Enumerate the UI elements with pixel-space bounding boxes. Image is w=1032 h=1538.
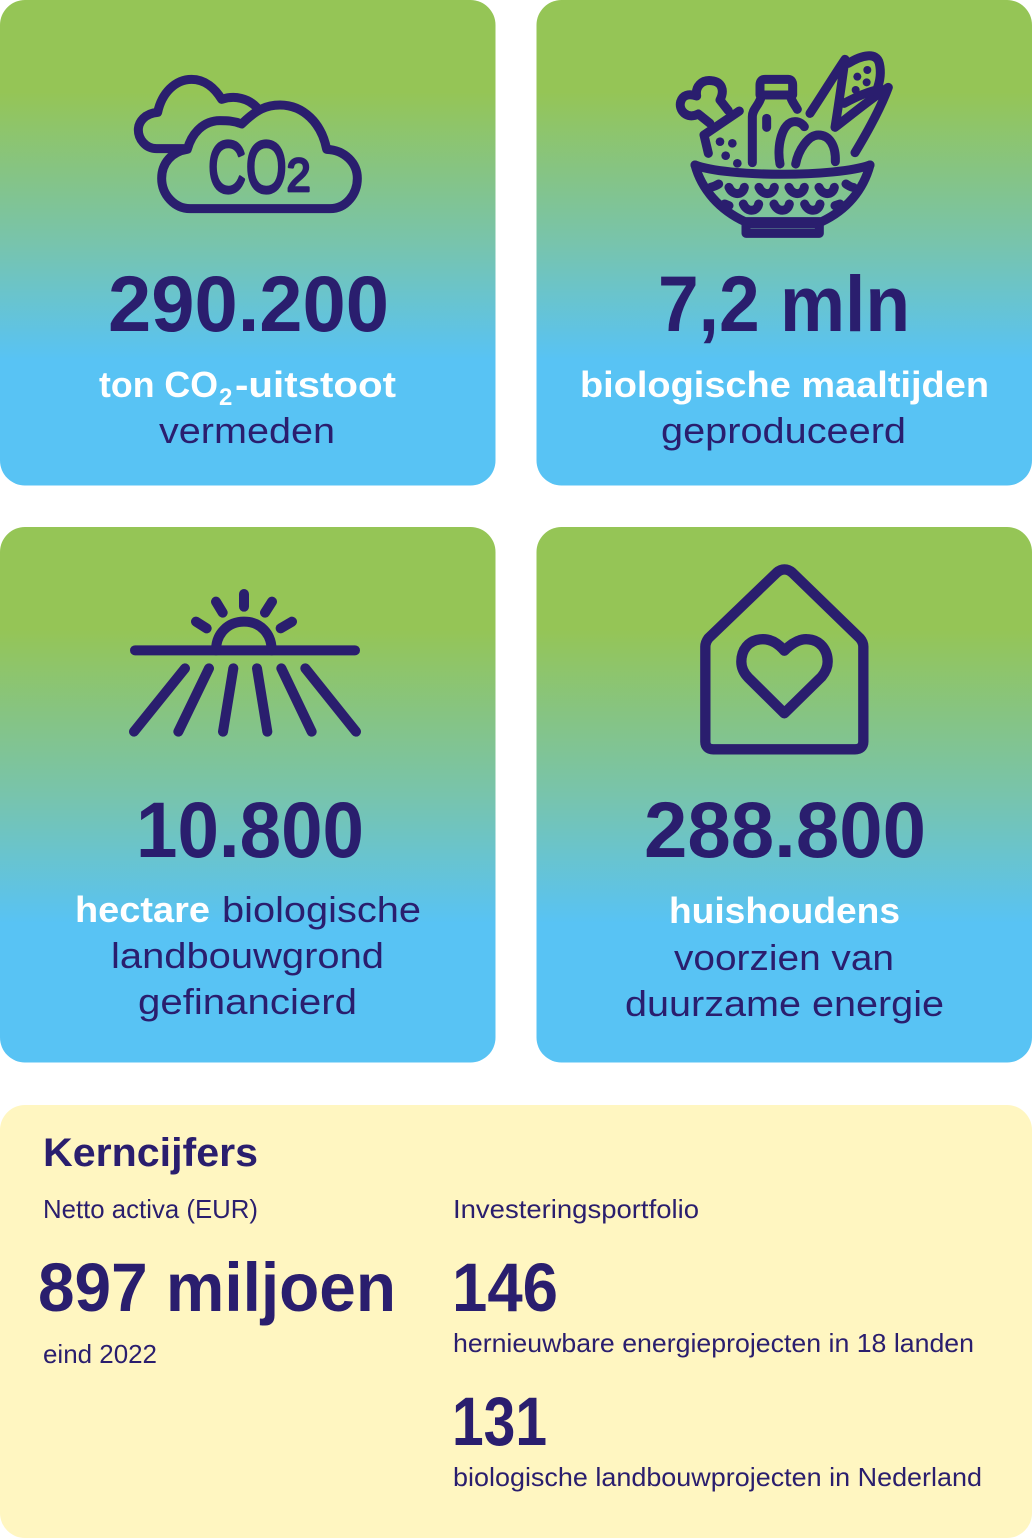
caption: landbouwgrond: landbouwgrond: [111, 935, 384, 976]
caption: hectare biologische: biologische: [222, 889, 421, 930]
caption: ton CO2-uitstoot: -uitstoot: [235, 364, 396, 405]
icon: sun over field: [134, 594, 356, 732]
label: organic farming projects: biologische landbouwprojecten in Nederland: [453, 1462, 982, 1492]
caption: duurzame energie: duurzame energie: [625, 983, 944, 1024]
icon: CO2 clouds: CO: [208, 126, 287, 208]
label: eind 2022: eind 2022: [43, 1339, 157, 1369]
icon: CO2 clouds: 2: [287, 149, 311, 201]
caption: ton CO2-uitstoot: 2: [219, 384, 232, 411]
caption: voorzien van: voorzien van: [674, 937, 894, 978]
caption: vermeden: vermeden: [159, 410, 335, 451]
panel: organic meals: [536, 0, 1032, 486]
caption: ton CO2-uitstoot: ton CO: [99, 364, 218, 405]
panel: organic farmland: [0, 527, 496, 1062]
panel: key figures: [0, 1105, 1032, 1538]
number: 7,2 mln: 7,2 mln: [658, 259, 910, 348]
panel: CO2 avoided: [0, 0, 496, 486]
caption: hectare biologische: hectare: [75, 889, 210, 930]
number: 897 miljoen: 897 miljoen: [38, 1249, 396, 1326]
number: 146: 146: [452, 1249, 558, 1326]
label: renewable energy projects: hernieuwbare energieprojecten in 18 landen: [453, 1328, 974, 1358]
number: 131: 131: [452, 1383, 547, 1460]
caption: geproduceerd: geproduceerd: [661, 410, 906, 451]
icon: CO2 clouds: [138, 79, 357, 209]
number: 290.200: 290.200: [108, 259, 389, 348]
caption: biologische maaltijden: biologische maaltijden: [580, 364, 989, 405]
number: 288.800: 288.800: [644, 785, 926, 874]
caption: huishoudens: huishoudens: [669, 890, 900, 931]
icon: house with heart: [705, 569, 863, 749]
heading: Kerncijfers: Kerncijfers: [43, 1131, 258, 1175]
caption: gefinancierd: gefinancierd: [138, 981, 357, 1022]
number: 10.800: 10.800: [136, 785, 364, 874]
panel: households: [536, 527, 1032, 1062]
label: Investeringsportfolio: Investeringsportfolio: [453, 1194, 699, 1224]
label: Netto activa: Netto activa (EUR): [43, 1194, 258, 1224]
icon: food bowl: [680, 56, 888, 233]
